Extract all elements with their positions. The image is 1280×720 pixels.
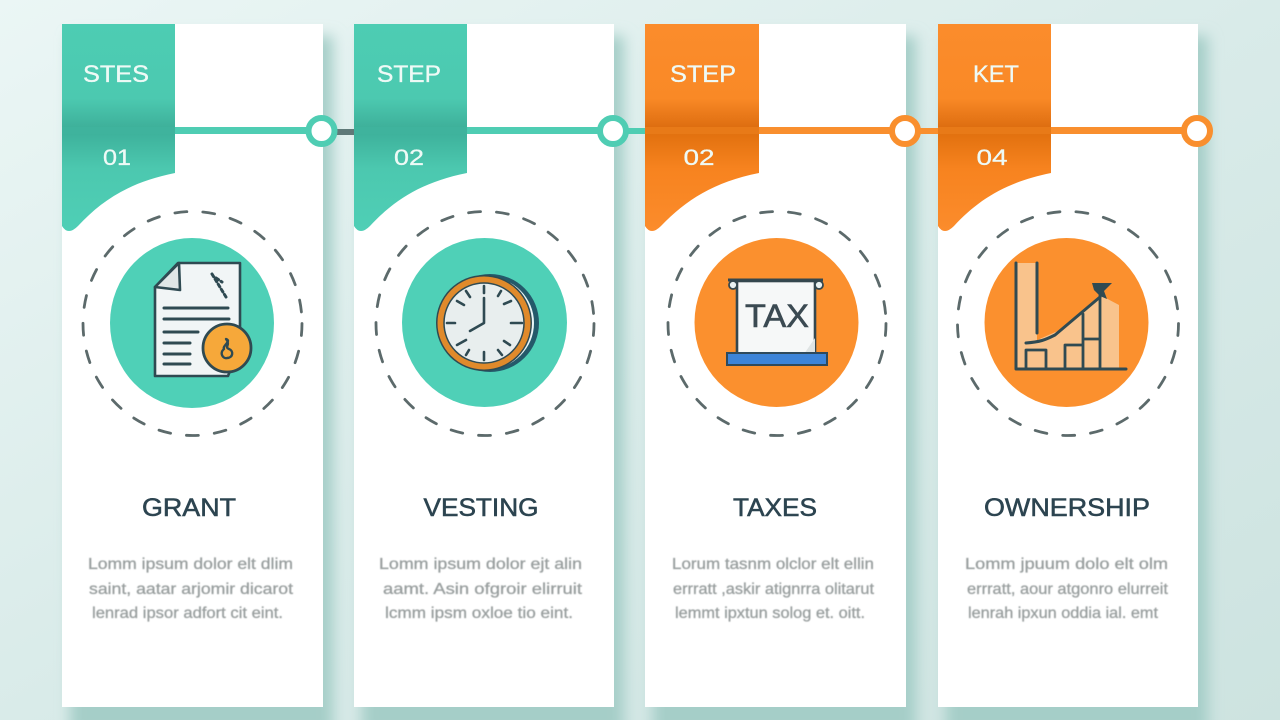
heading 4: OWNERSHIP [984, 494, 1150, 522]
tab 2 number: 02 [394, 145, 424, 170]
tab 3 number: 02 [684, 145, 714, 170]
tab 1 [62, 24, 175, 231]
body text 2 [379, 556, 583, 622]
body text 4 [965, 556, 1169, 622]
tab 4 number: 04 [976, 145, 1008, 170]
body text 4: lenrah ipxun oddia ial. emt [968, 605, 1159, 622]
icon circle 3 [694, 238, 858, 407]
card 3 background [645, 24, 906, 707]
heading 3: TAXES [733, 494, 817, 522]
tab 1 number: 01 [103, 145, 131, 170]
heading 1: GRANT [142, 494, 236, 522]
tab 3 [645, 24, 759, 231]
tab 4 [938, 24, 1051, 231]
icon circle 4 [984, 238, 1148, 407]
body text 4: Lomm jpuum dolo elt olm [965, 556, 1168, 573]
timeline 2 [354, 118, 645, 144]
dashed ring 3 [668, 212, 886, 436]
card 2 background [354, 24, 614, 707]
body text 2: lcmm ipsm oxloe tio eint. [385, 605, 573, 622]
panel: step 1 grant [62, 24, 354, 707]
icon circle 1 [110, 238, 274, 408]
card 1 background [62, 24, 323, 707]
body text 4: errratt, aour atgonro elurreit [967, 581, 1169, 598]
tab 2 [354, 24, 467, 231]
card 4 background [938, 24, 1198, 707]
panel: step 4 ownership [938, 24, 1210, 707]
tab 3 label: STEP [670, 61, 736, 88]
body text 2: Lomm ipsum dolor ejt alin [379, 556, 582, 573]
heading 2: VESTING [424, 494, 538, 522]
panel: step 2 vesting [354, 24, 645, 707]
dashed ring 4 [958, 212, 1178, 436]
icon: rising bar chart [1016, 263, 1126, 369]
body text 1 [88, 556, 294, 622]
dashed ring 2 [376, 212, 594, 436]
dashed ring 1 [83, 212, 302, 436]
body text 3: errratt ,askir atignrra olitarut [673, 581, 875, 598]
timeline 1 [62, 118, 354, 144]
icon: clock [436, 274, 539, 372]
tab 1 label: STES [83, 61, 149, 88]
panel: step 3 taxes [645, 24, 938, 707]
timeline 3 [645, 118, 938, 144]
icon circle 2 [402, 238, 567, 407]
timeline 4 [938, 118, 1210, 144]
body text 1: Lomm ipsum dolor elt dlim [88, 556, 293, 573]
tab 2 label: STEP [377, 61, 441, 88]
body text 1: lenrad ipsor adfort cit eint. [92, 605, 283, 622]
body text 2: aamt. Asin ofgroir elirruit [383, 581, 583, 598]
body text 3 [672, 556, 875, 622]
icon: tax board [727, 280, 827, 365]
body text 3: lemmt ipxtun solog et. oitt. [675, 605, 865, 622]
icon: document with coin [155, 263, 251, 376]
body text 1: saint, aatar arjomir dicarot [89, 581, 294, 598]
tax label: TAX [745, 298, 809, 334]
tab 4 label: KET [973, 61, 1019, 88]
body text 3: Lorum tasnm olclor elt ellin [672, 556, 874, 573]
